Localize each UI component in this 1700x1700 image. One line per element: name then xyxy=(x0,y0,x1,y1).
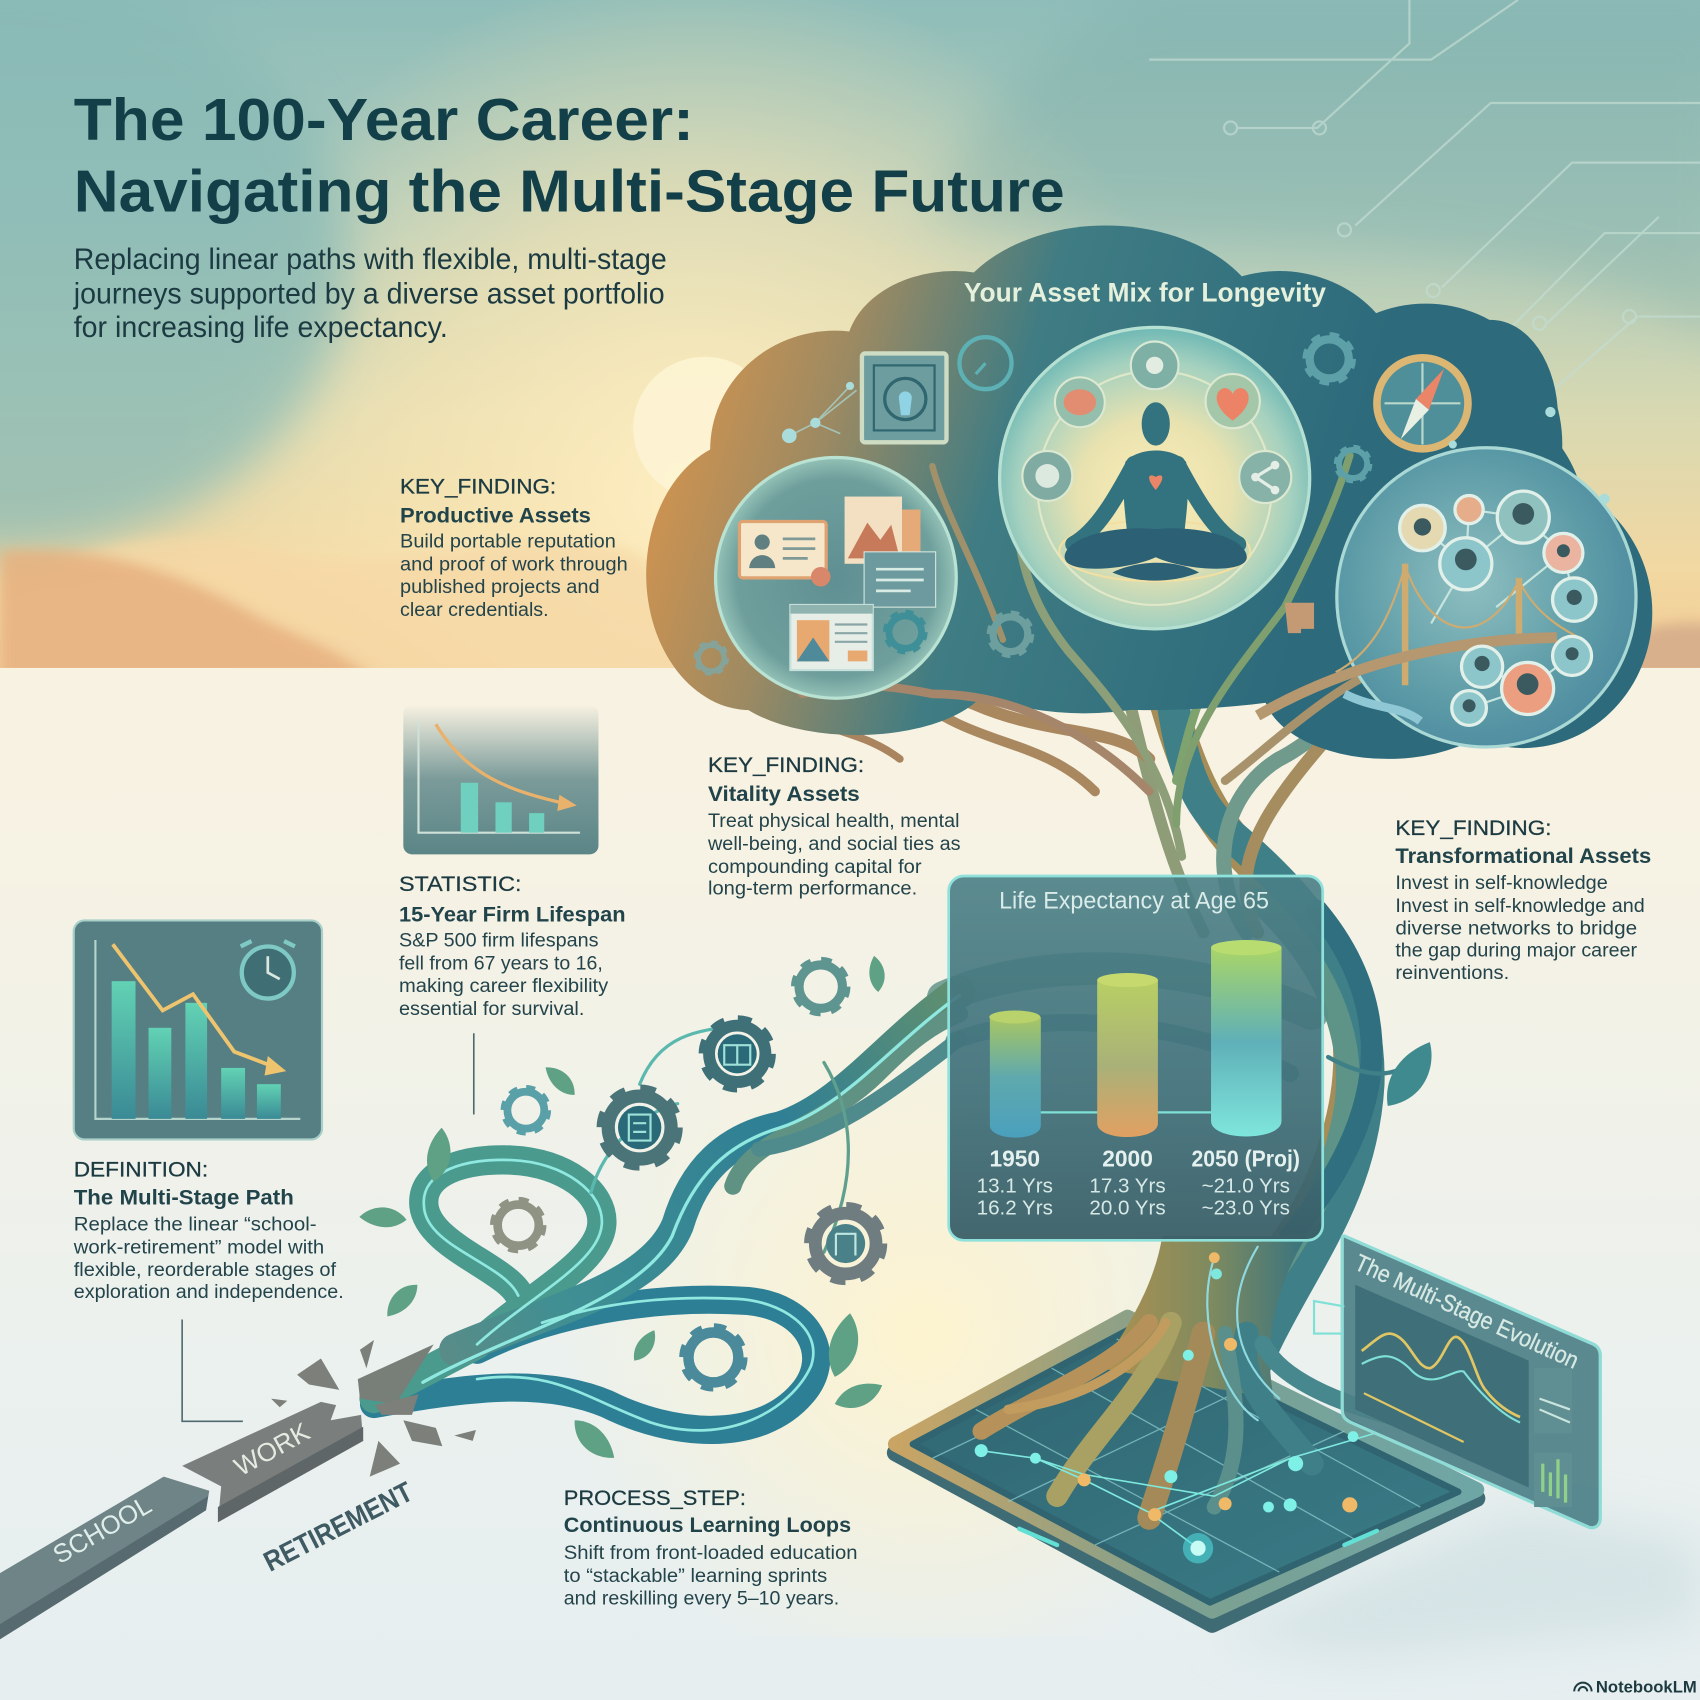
tree roots xyxy=(981,1236,1409,1518)
text: transformational assets: KEY_FINDING: xyxy=(1395,815,1551,840)
text: productive assets: and proof of work through xyxy=(400,553,628,575)
title xyxy=(74,86,1065,224)
text: transformational assets xyxy=(1395,815,1651,984)
bar labels: 1950 xyxy=(989,1146,1040,1172)
arrow: work: WORK xyxy=(229,1416,315,1482)
icon: puzzle piece xyxy=(1285,603,1314,633)
text: transformational assets: Invest in self-knowledge and xyxy=(1395,895,1645,917)
text: continuous learning loops: to “stackable” learning sprints xyxy=(564,1565,827,1587)
rubble xyxy=(271,1340,476,1477)
text: multi-stage path definition: work-retirement” model with xyxy=(73,1236,324,1258)
subtitle: journeys supported by a diverse asset portfolio xyxy=(73,279,665,311)
text: continuous learning loops: Shift from front-loaded education xyxy=(564,1542,858,1564)
canopy xyxy=(646,226,1652,759)
bar labels: ~21.0 Yrs xyxy=(1202,1175,1290,1198)
learning gears xyxy=(493,960,883,1388)
evolution dashboard panel: The Multi-Stage Evolution xyxy=(1351,1249,1583,1375)
icons: canopy gears xyxy=(695,335,1370,674)
icon: gear xyxy=(885,612,925,652)
text: transformational assets: Transformational Assets xyxy=(1395,843,1651,868)
text: productive assets: Productive Assets xyxy=(400,503,591,528)
footer: NotebookLM mark: NotebookLM xyxy=(1596,1678,1697,1696)
text: vitality assets: compounding capital for xyxy=(708,856,922,878)
subtitle: Replacing linear paths with flexible, multi-stage xyxy=(74,244,667,276)
icon: id card xyxy=(739,521,830,587)
bar labels: 16.2 Yrs xyxy=(977,1196,1053,1219)
branches over canopy xyxy=(802,455,1399,857)
platform xyxy=(896,1317,1477,1624)
arrow: work xyxy=(182,1402,363,1522)
panel: life expectancy chart: Life Expectancy at Age 65 xyxy=(999,888,1269,915)
leaves xyxy=(359,956,1449,1467)
text: firm lifespan statistic: S&P 500 firm lifespans xyxy=(399,929,599,951)
bar 2000 xyxy=(1097,973,1158,1137)
icon: browser window xyxy=(790,605,873,670)
text: productive assets xyxy=(400,473,628,621)
text: vitality assets: Vitality Assets xyxy=(708,781,860,806)
text: continuous learning loops: Continuous Learning Loops xyxy=(564,1512,851,1537)
text: transformational assets: reinventions. xyxy=(1395,962,1509,984)
text: productive assets: KEY_FINDING: xyxy=(400,473,556,498)
icon: compass xyxy=(1377,358,1468,449)
text: productive assets: Build portable reputation xyxy=(400,531,616,553)
connector lines xyxy=(182,1033,474,1421)
panel: centre bubble, vitality assets xyxy=(1000,327,1310,629)
bar labels: 2050 (Proj) xyxy=(1192,1146,1300,1172)
bar 1950 xyxy=(989,1010,1041,1138)
bar labels: ~23.0 Yrs xyxy=(1202,1196,1290,1219)
bar labels: 2000 xyxy=(1102,1146,1153,1172)
tree trunk and branches xyxy=(770,369,1518,1409)
text: firm lifespan statistic: STATISTIC: xyxy=(399,871,521,896)
bar labels: 13.1 Yrs xyxy=(977,1175,1053,1198)
text: multi-stage path definition: flexible, reorderable stages of xyxy=(74,1259,337,1281)
icon: safe xyxy=(862,353,946,442)
icon: heart xyxy=(1206,374,1260,428)
figure: meditating person xyxy=(1065,402,1247,581)
text: vitality assets: long-term performance. xyxy=(708,877,917,899)
bar labels xyxy=(977,1146,1300,1219)
panel: declining lifespan chart xyxy=(74,920,322,1139)
text: firm lifespan statistic: fell from 67 years to 16, xyxy=(399,952,603,974)
canopy heading: Your Asset Mix for Longevity xyxy=(964,276,1326,307)
subtitle xyxy=(73,244,667,344)
circuit line decoration xyxy=(1149,0,1700,402)
title: Navigating the Multi-Stage Future xyxy=(74,157,1065,224)
arrow: school: SCHOOL xyxy=(48,1489,157,1570)
small declining chart xyxy=(403,705,598,854)
panel: left bubble, productive assets xyxy=(716,458,956,698)
icon: stopwatch xyxy=(241,941,295,999)
text: transformational assets: diverse networks to bridge xyxy=(1395,918,1637,940)
label: retirement: RETIREMENT xyxy=(258,1475,418,1577)
text: vitality assets: Treat physical health, mental xyxy=(708,810,960,832)
icon: bridge xyxy=(1258,564,1583,716)
panel: life expectancy chart xyxy=(949,876,1323,1240)
text: multi-stage path definition: exploration and independence. xyxy=(74,1281,344,1303)
text: transformational assets: Invest in self-knowledge xyxy=(1395,872,1608,894)
bar labels: 17.3 Yrs xyxy=(1089,1175,1166,1198)
network dots on canopy xyxy=(783,383,1609,503)
platform shadow xyxy=(1214,1507,1700,1659)
panel: right bubble, transformational assets xyxy=(1258,448,1636,747)
people nodes xyxy=(1400,491,1596,725)
text: vitality assets: well-being, and social ties as xyxy=(707,833,961,855)
title: The 100-Year Career: xyxy=(74,86,694,153)
broken linear path xyxy=(0,1340,476,1639)
text: continuous learning loops: and reskilling every 5–10 years. xyxy=(564,1588,839,1610)
text: continuous learning loops: PROCESS_STEP: xyxy=(564,1485,746,1510)
bar 2050 xyxy=(1211,940,1282,1136)
text: multi-stage path definition: DEFINITION: xyxy=(74,1156,208,1181)
arrow: school xyxy=(0,1477,209,1639)
text: multi-stage path definition xyxy=(73,1156,344,1303)
text: firm lifespan statistic: essential for survival. xyxy=(399,998,584,1020)
text: productive assets: clear credentials. xyxy=(400,599,549,621)
text: continuous learning loops xyxy=(564,1485,858,1610)
text: firm lifespan statistic xyxy=(399,871,626,1020)
icon: brain xyxy=(1055,377,1105,427)
icon: clock ring xyxy=(960,337,1012,389)
icon: image tiles xyxy=(845,497,936,607)
text: firm lifespan statistic: making career flexibility xyxy=(399,975,608,997)
text: firm lifespan statistic: 15-Year Firm Lifespan xyxy=(399,902,626,927)
text: vitality assets xyxy=(707,752,961,899)
icon: share nodes xyxy=(1239,451,1291,503)
text: multi-stage path definition: The Multi-Stage Path xyxy=(74,1185,294,1210)
evolution dashboard panel xyxy=(1314,1236,1600,1528)
glowing network nodes xyxy=(975,1252,1382,1563)
text: productive assets: published projects and xyxy=(400,576,600,598)
text: vitality assets: KEY_FINDING: xyxy=(708,752,864,777)
text: multi-stage path definition: Replace the linear “school- xyxy=(74,1214,317,1236)
text: transformational assets: the gap during major career xyxy=(1395,939,1638,961)
multi-stage winding road xyxy=(374,992,960,1430)
subtitle: for increasing life expectancy. xyxy=(74,312,448,344)
bar labels: 20.0 Yrs xyxy=(1089,1196,1166,1219)
